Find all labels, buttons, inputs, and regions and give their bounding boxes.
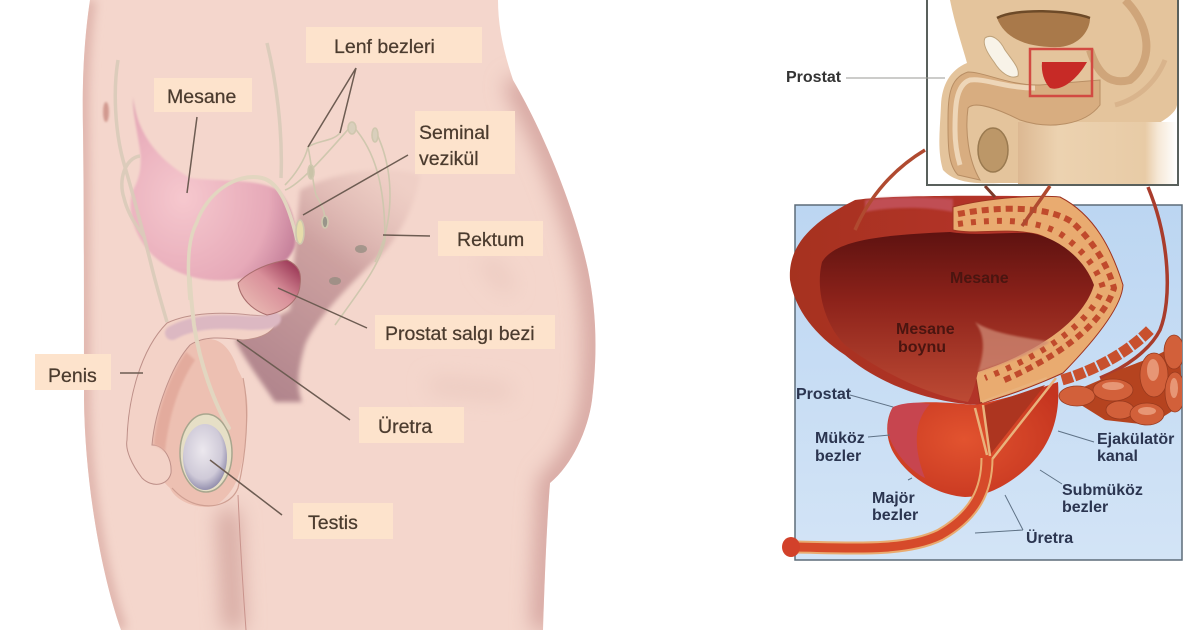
- icon: bladder: [131, 97, 295, 280]
- bladder outer wall: [790, 196, 1123, 405]
- text: Submüköz bezler: [1062, 482, 1143, 516]
- label: Mesane: [154, 78, 252, 112]
- text: Üretra: Üretra: [1026, 528, 1073, 547]
- inset frame: [927, 0, 1178, 185]
- short connector: [985, 186, 995, 197]
- text: Müköz bezler: Müköz: [815, 430, 865, 447]
- label: Prostat salgı bezi: [375, 315, 555, 349]
- text: Submüköz bezler: Submüköz: [1062, 482, 1143, 499]
- wall texture: [958, 209, 1114, 382]
- vas deferens: [190, 177, 297, 428]
- label: Seminal vezikül: Seminal: [419, 122, 489, 144]
- red focus box: [1030, 49, 1092, 96]
- panel: inset pelvic section: [927, 0, 1178, 185]
- panel: pelvis side view: [83, 0, 595, 630]
- thigh: [1018, 122, 1177, 184]
- label: Lenf bezleri: [306, 27, 482, 63]
- text: Majör bezler: bezler: [872, 507, 918, 524]
- label: Mesane: Mesane: [167, 86, 236, 108]
- inset body: [939, 0, 1177, 183]
- label: Lenf bezleri: Lenf bezleri: [334, 36, 435, 58]
- label: Penis: [35, 354, 111, 390]
- text: Mesane boynu: Mesane: [896, 321, 955, 338]
- vas loop over bladder: [188, 177, 297, 300]
- top connector vessels: [855, 150, 1050, 230]
- scrotum outline: [172, 378, 247, 506]
- text: Müköz bezler: bezler: [815, 448, 861, 465]
- rectum colon band: [1090, 0, 1146, 81]
- text: Submüköz bezler: bezler: [1062, 499, 1108, 516]
- text: Ejakülatör kanal: Ejakülatör: [1097, 431, 1174, 448]
- lymph nodes and ducts: [285, 122, 390, 325]
- prostate: [887, 382, 1058, 497]
- urethra core: [797, 458, 987, 548]
- penis inner shading: [154, 352, 195, 452]
- panel: bladder and prostate section: [782, 150, 1185, 560]
- text: Ejakülatör kanal: kanal: [1097, 448, 1138, 465]
- label: Seminal vezikül: vezikül: [419, 148, 479, 170]
- urethra: [172, 319, 274, 333]
- urethra tip: [782, 537, 800, 557]
- mucosal glands: [888, 403, 930, 478]
- label: Üretra: Üretra: [378, 416, 432, 438]
- urethra: [797, 458, 987, 548]
- shaded pelvic region: [235, 170, 420, 402]
- label: Penis: Penis: [48, 365, 97, 387]
- label: Testis: Testis: [308, 512, 358, 534]
- text: Majör bezler: [872, 490, 918, 524]
- bladder neck highlight: [975, 322, 1050, 372]
- thigh fold: [1115, 60, 1165, 105]
- label: Rektum: Rektum: [457, 229, 524, 251]
- pink top streak: [865, 197, 953, 212]
- text: Prostat: Prostat: [796, 386, 852, 403]
- bladder cavity: [820, 232, 1094, 402]
- blue background: [795, 205, 1182, 560]
- organ cavity: [997, 11, 1090, 47]
- label: Prostat top: Prostat: [786, 69, 842, 86]
- icon: testis: [180, 414, 232, 492]
- urethra centerline: [955, 80, 1035, 165]
- body silhouette: [83, 0, 595, 630]
- ducts: [975, 378, 1056, 462]
- body inner edge line: [238, 495, 246, 630]
- right vessel: [1100, 187, 1167, 378]
- testis: [978, 128, 1008, 172]
- spongy wall section: [953, 196, 1123, 403]
- label: Prostat salgı bezi: Prostat salgı bezi: [385, 323, 535, 345]
- label: Testis: [293, 503, 393, 539]
- penis and urethra bulb: [127, 313, 277, 484]
- text: Mesane boynu: [896, 321, 955, 356]
- label: Seminal vezikül: [415, 111, 515, 174]
- hip mark: [103, 102, 109, 122]
- icon: prostate: [238, 260, 300, 315]
- text: Müköz bezler: [815, 430, 865, 465]
- seminal vesicle cluster: [1059, 330, 1185, 425]
- inset prostate: [1042, 62, 1087, 89]
- label: Rektum: [438, 221, 543, 256]
- section leader lines: [850, 395, 1094, 533]
- label: Üretra: [359, 407, 464, 443]
- text: Mesane boynu: boynu: [898, 339, 946, 356]
- text: Majör bezler: Majör: [872, 490, 915, 507]
- skin edge shading: [83, 0, 595, 630]
- text: Mesane: Mesane: [950, 270, 1009, 287]
- urethra and penis section: [948, 72, 1100, 180]
- pubic bone: [984, 36, 1018, 77]
- inner wedge: [983, 385, 1045, 455]
- ascending tubes: [115, 43, 281, 322]
- label leader lines: [120, 68, 430, 515]
- scrotum: [152, 339, 248, 507]
- text: Ejakülatör kanal: [1097, 431, 1174, 465]
- cavity top edge: [997, 11, 1090, 18]
